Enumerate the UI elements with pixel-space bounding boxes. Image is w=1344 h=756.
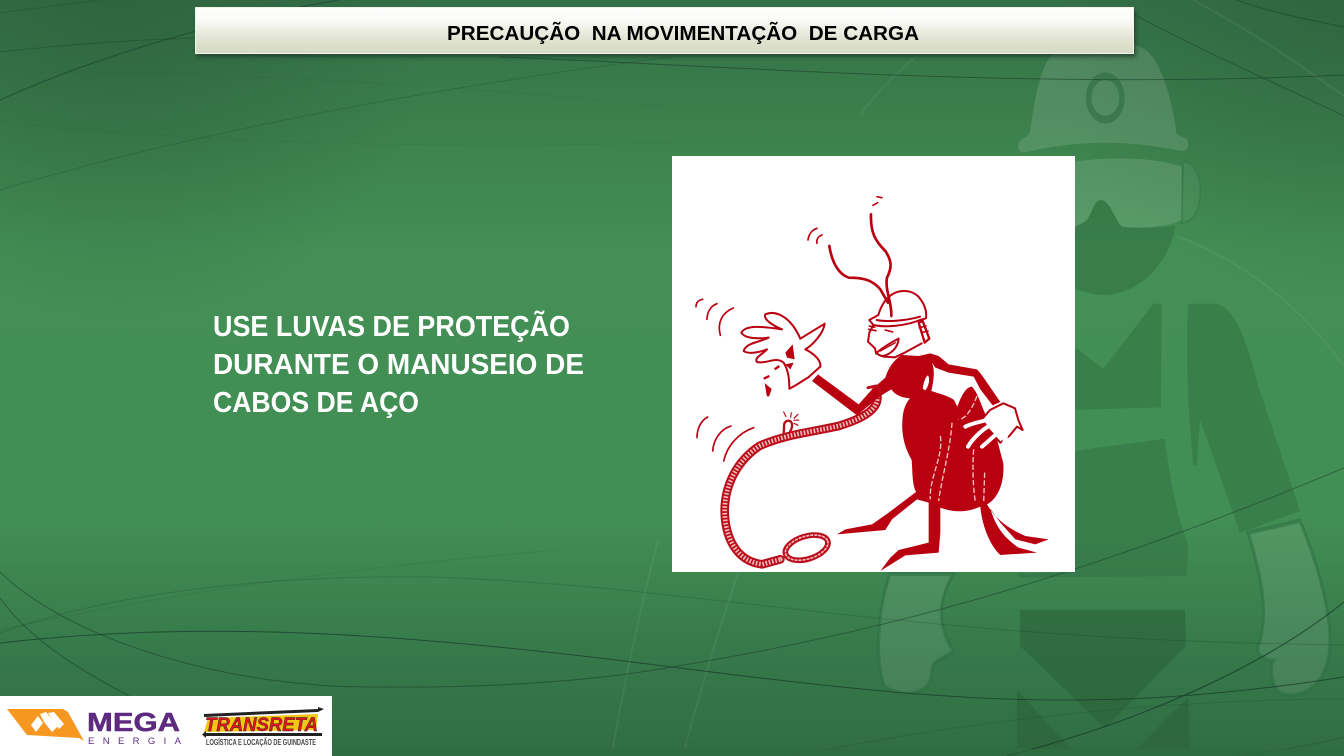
logo bar [0, 696, 332, 756]
cartoon: body seams [930, 396, 985, 503]
logo: Mega Energia [7, 707, 182, 747]
bottom band [332, 749, 1344, 756]
body text: safety instruction [213, 309, 584, 419]
body text: safety instruction: DURANTE O MANUSEIO DE [213, 349, 584, 381]
body text: safety instruction: CABOS DE AÇO [213, 387, 419, 419]
logo: Transreta: TRANSRETA [205, 715, 318, 736]
cartoon: motion marks [696, 299, 754, 461]
cartoon: body [812, 353, 1049, 571]
cartoon: injured hand [741, 313, 825, 389]
cartoon: head and helmet [868, 291, 929, 357]
cartoon: rope [725, 391, 877, 565]
cartoon: hand on hip [965, 403, 1023, 449]
logo: Mega Energia: ENERGIA [88, 736, 182, 747]
illustration panel: ant with injured hand [672, 156, 1075, 572]
logo: Transreta: LOGÍSTICA E LOCAÇÃO DE GUINDASTE [206, 738, 316, 747]
title text: PRECAUÇÃO NA MOVIMENTAÇÃO DE CARGA [447, 22, 919, 45]
title bar [196, 8, 1136, 57]
decorative light arcs [613, 0, 1344, 747]
cartoon: cuff on rope [868, 386, 882, 393]
body text: safety instruction: USE LUVAS DE PROTEÇÃO [213, 309, 570, 343]
background worker silhouette [860, 41, 1344, 749]
cartoon: antennae [808, 197, 891, 316]
cartoon: thorax notch [923, 375, 929, 390]
logo: Mega Energia: MEGA [87, 707, 180, 737]
logo: Transreta [202, 707, 324, 747]
